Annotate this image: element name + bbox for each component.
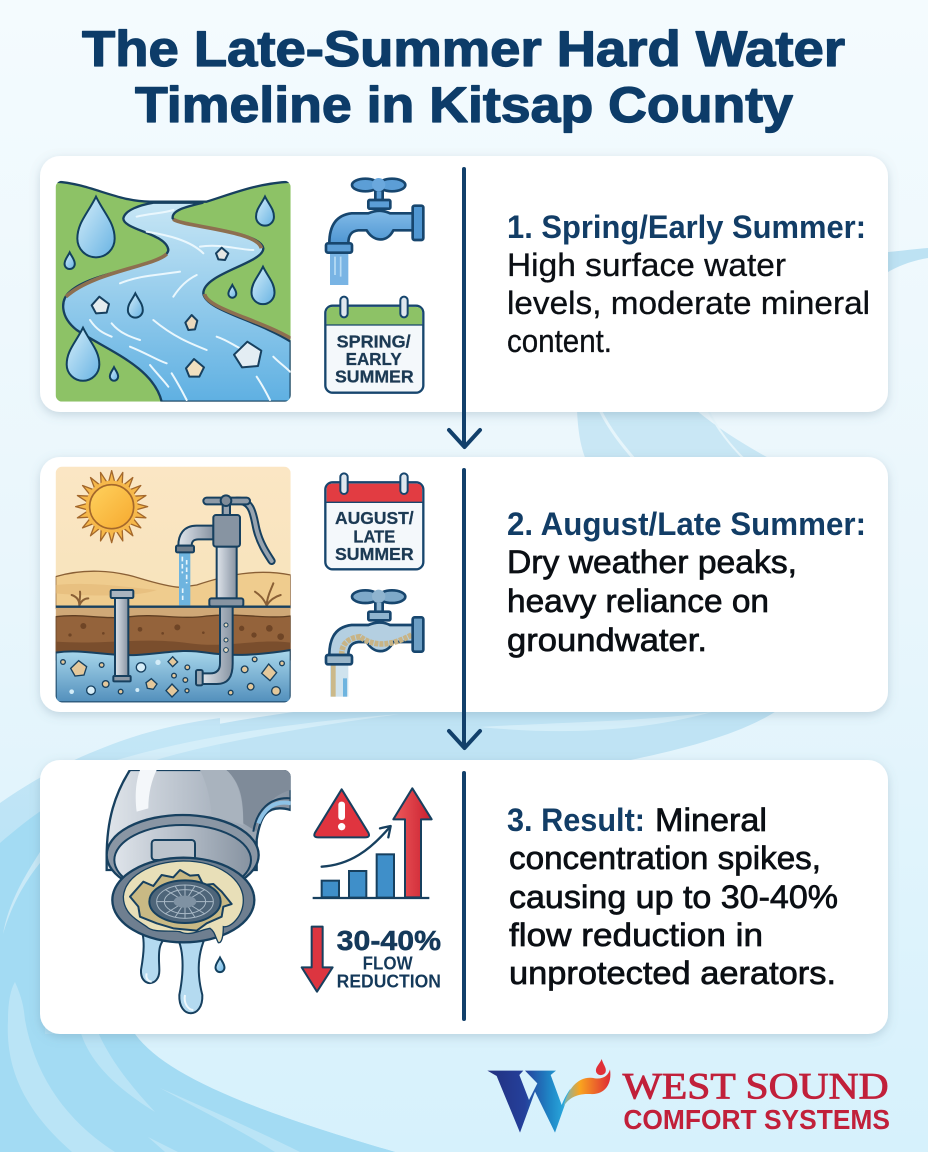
icon: spring calendar	[325, 297, 423, 393]
step 2 text	[507, 506, 866, 658]
step 3 text: causing up to 30-40%	[509, 879, 838, 915]
step 2 text: groundwater.	[507, 622, 707, 658]
left well pipe	[111, 590, 133, 681]
step 2 text: Dry weather peaks,	[507, 544, 797, 580]
flow reduction callout: 30-40%	[337, 925, 441, 956]
icon: spring calendar: SPRING/	[337, 332, 411, 352]
logo: West Sound Comfort Systems	[487, 1059, 890, 1135]
icon: august calendar: AUGUST/	[335, 508, 414, 528]
logo: West Sound Comfort Systems: COMFORT SYSTEMS	[623, 1104, 890, 1135]
icon: scaled faucet	[326, 590, 423, 697]
icon: august calendar: SUMMER	[335, 544, 414, 564]
sun	[76, 471, 148, 543]
illustration group 3	[107, 770, 441, 1013]
timeline arrows	[449, 169, 480, 1019]
icon: blue faucet	[326, 178, 423, 285]
title	[82, 21, 845, 133]
step 3 text: Mineral	[655, 802, 767, 838]
title: The Late-Summer Hard Water	[82, 21, 845, 77]
flow reduction callout	[302, 925, 441, 992]
step 2 text: heavy reliance on	[507, 583, 769, 619]
step 3 text: flow reduction in	[509, 917, 763, 953]
step 2 text: 2. August/Late Summer:	[507, 506, 866, 542]
card 3	[40, 760, 888, 1034]
icon: august calendar	[325, 473, 423, 569]
icon: august calendar: LATE	[353, 526, 395, 546]
card 1	[40, 156, 888, 412]
step 1 text: content.	[507, 323, 612, 359]
illustration group 2	[56, 467, 423, 702]
water stream	[179, 553, 190, 605]
card 2	[40, 457, 888, 712]
logo: West Sound Comfort Systems: WEST SOUND	[623, 1066, 889, 1107]
step 3 text	[507, 802, 838, 991]
flow reduction callout: FLOW	[363, 952, 413, 973]
icon: spring calendar: EARLY	[346, 349, 402, 369]
step 3 text: concentration spikes,	[509, 840, 821, 876]
river illustration	[56, 182, 291, 402]
illustration group 1	[56, 178, 423, 402]
title: Timeline in Kitsap County	[135, 77, 793, 133]
step 3 text: unprotected aerators.	[509, 955, 836, 991]
hand pump	[176, 495, 272, 685]
panel 3: result	[40, 760, 888, 1034]
rising bar chart with arrow	[313, 788, 432, 898]
well pump illustration	[56, 467, 291, 702]
icon: warning triangle	[314, 789, 369, 837]
step 1 text	[507, 209, 870, 359]
step 1 text: High surface water	[507, 247, 786, 283]
clogged aerator illustration	[107, 770, 291, 1013]
flow reduction callout: REDUCTION	[337, 970, 441, 991]
panel 2: august / late summer	[40, 457, 888, 712]
icon: spring calendar: SUMMER	[335, 367, 414, 387]
step 1 text: 1. Spring/Early Summer:	[507, 209, 866, 245]
step 1 text: levels, moderate mineral	[507, 285, 870, 321]
step 3 text: 3. Result:	[507, 802, 645, 838]
logo mark	[487, 1059, 610, 1133]
panel 1: spring / early summer	[40, 156, 888, 412]
